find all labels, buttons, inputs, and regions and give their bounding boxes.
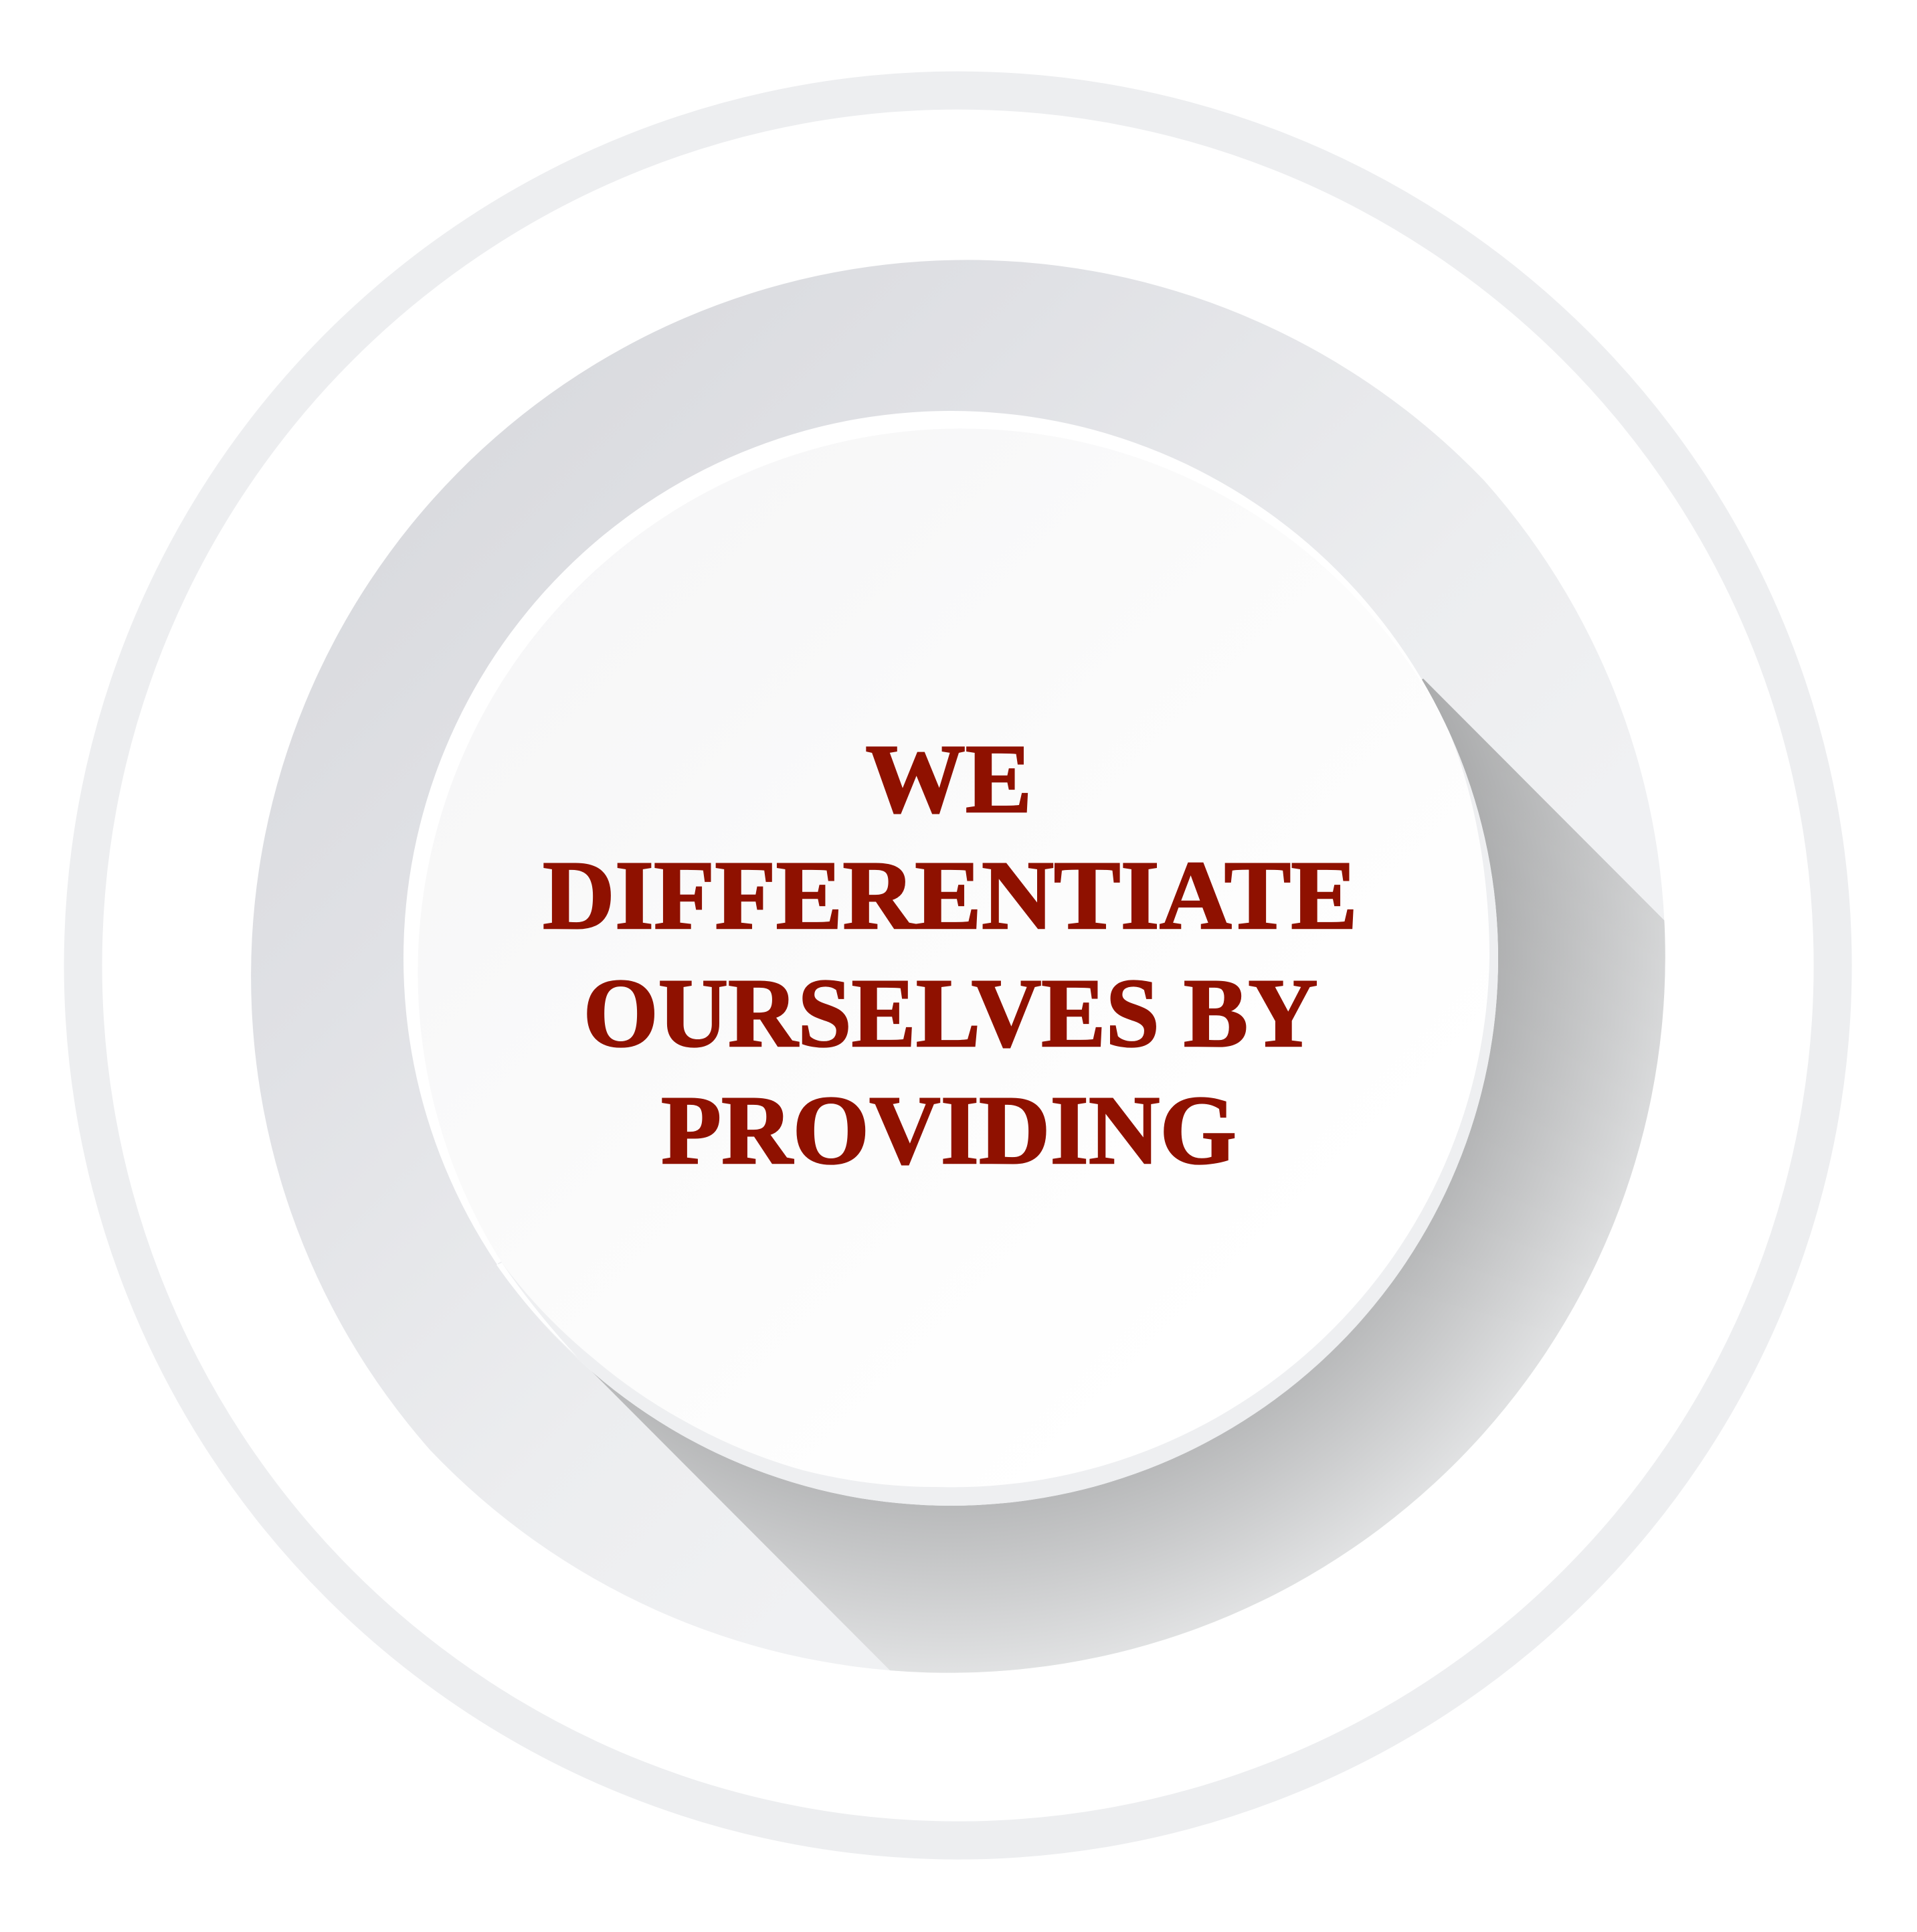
- heading text: DIFFERENTIATE: [543, 841, 1358, 950]
- heading text: PROVIDING: [661, 1075, 1237, 1184]
- rim sliver: [496, 1263, 577, 1357]
- large disc: [251, 260, 1665, 1673]
- disc face: [418, 428, 1489, 1487]
- long drop shadow: [591, 679, 1665, 1673]
- disc rim lower edge: [498, 731, 1498, 1506]
- heading text: OURSELVES BY: [583, 958, 1318, 1067]
- heading text: [543, 724, 1358, 1184]
- heading text: WE: [866, 724, 1032, 833]
- central disc: [403, 411, 1498, 1506]
- disc rim highlight: [403, 411, 1498, 1506]
